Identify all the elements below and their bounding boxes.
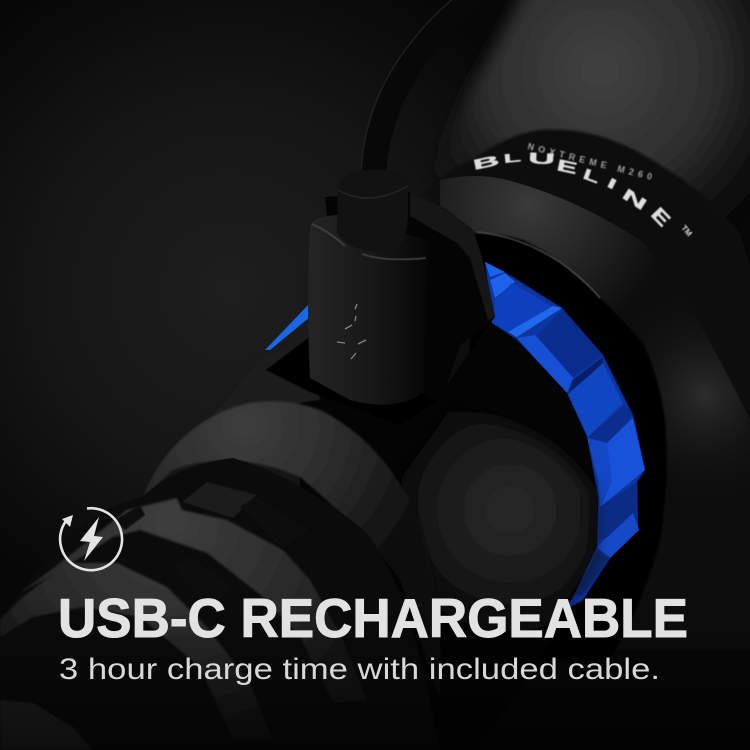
heading: USB-C RECHARGEABLE bbox=[58, 587, 688, 649]
plug highlight bbox=[312, 224, 426, 259]
product name BLUELINE: B bbox=[471, 152, 501, 173]
dark recess behind ring bbox=[470, 233, 667, 660]
USB cable bbox=[361, 0, 478, 190]
head collar bbox=[440, 176, 750, 478]
grip upper rib bbox=[20, 498, 367, 703]
body shaded surface bbox=[400, 410, 592, 650]
product name BLUELINE: N bbox=[619, 185, 650, 214]
ring left sliver bbox=[265, 303, 310, 350]
USB-C plug bbox=[308, 170, 495, 405]
body between ring and collar bbox=[300, 323, 598, 750]
flashlight barrel bbox=[400, 0, 750, 340]
grip lower rib bbox=[0, 563, 273, 740]
grip blocks bbox=[182, 482, 257, 518]
dark band with product name bbox=[425, 129, 750, 440]
usb symbol bbox=[337, 304, 366, 359]
product name BLUELINE: E bbox=[647, 203, 675, 231]
blue ring bbox=[265, 262, 645, 610]
flashlight shoulder bbox=[143, 340, 320, 497]
ring base bbox=[485, 262, 645, 610]
product name BLUELINE: I bbox=[604, 175, 619, 193]
ring teeth bbox=[485, 262, 505, 277]
strain relief bbox=[337, 170, 408, 251]
product name BLUELINE: E bbox=[555, 156, 579, 178]
charging port recess bbox=[266, 335, 440, 425]
product name BLUELINE: L bbox=[503, 150, 522, 166]
plug latch bbox=[325, 192, 495, 405]
plug body bbox=[308, 215, 428, 405]
icon: recharge bolt bbox=[60, 508, 122, 570]
subheading: 3 hour charge time with included cable. bbox=[59, 653, 660, 686]
grip inner rib bbox=[0, 700, 93, 750]
product name BLUELINE bbox=[471, 149, 694, 238]
product name BLUELINE: TM bbox=[679, 224, 694, 238]
lower collar bbox=[143, 401, 441, 700]
rubber grip bbox=[0, 458, 440, 750]
product model text: NOXTREME M260 bbox=[527, 141, 653, 182]
highlight edge of recess bbox=[477, 232, 600, 298]
product name BLUELINE: L bbox=[581, 165, 602, 187]
bottom fade bbox=[0, 600, 750, 750]
product name BLUELINE: U bbox=[528, 149, 555, 168]
